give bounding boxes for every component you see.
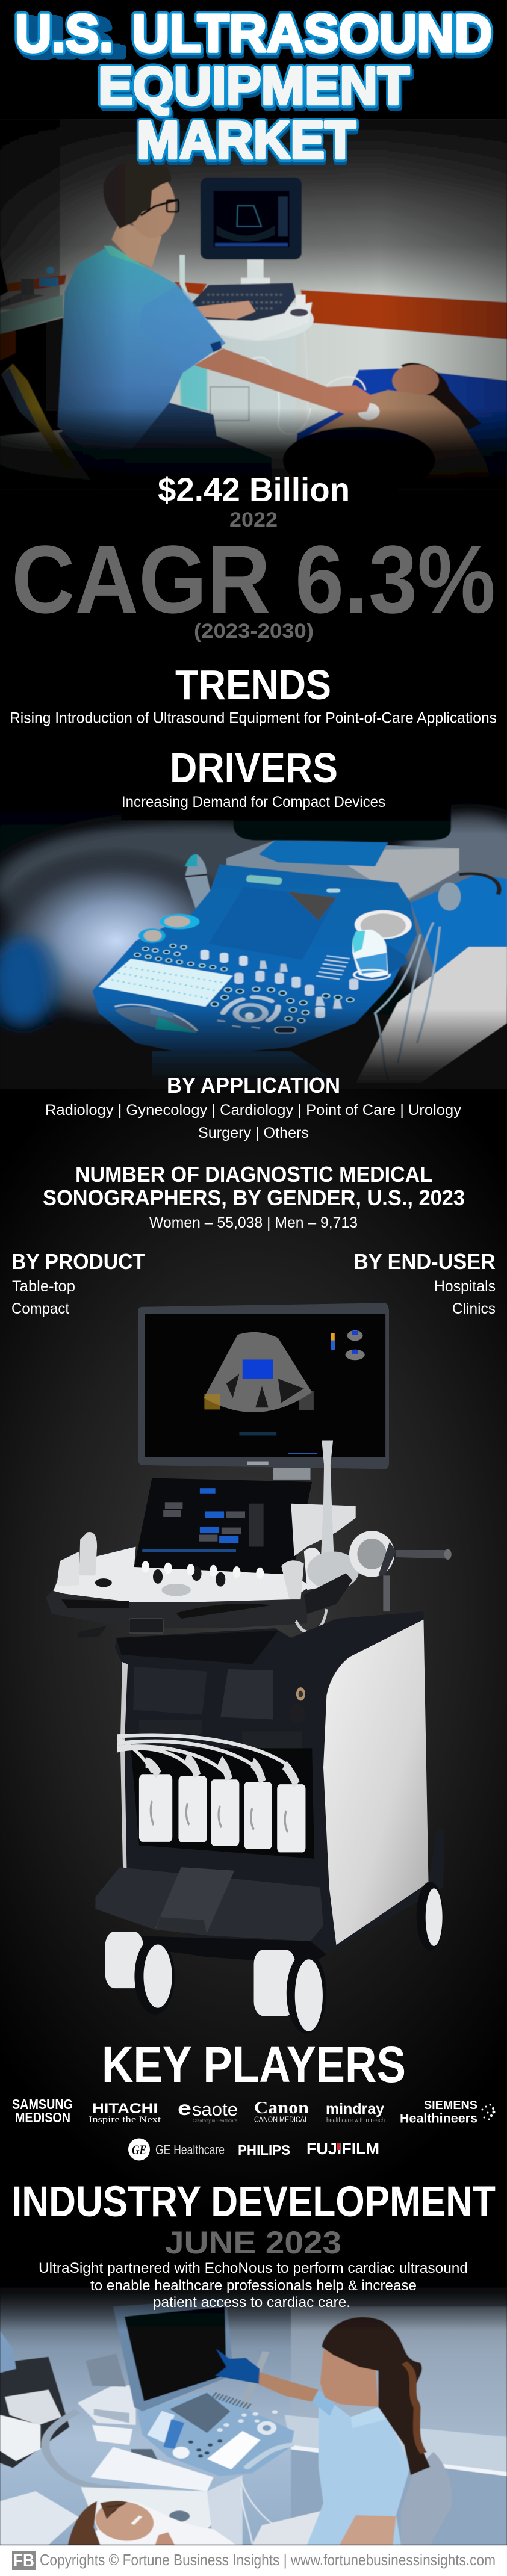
title: ULTRASOUND <box>132 4 492 63</box>
title: ULTRASOUND <box>133 7 492 67</box>
by end-user: BY END-USER <box>353 1249 496 1274</box>
by application: BY APPLICATION <box>167 1073 340 1098</box>
photo: sonographer examining patient <box>0 119 507 494</box>
monitor <box>233 803 452 841</box>
ultrasound machine illustration <box>46 1303 452 2034</box>
logo: Esaote: Creativity in Healthcare <box>193 2118 237 2124</box>
logo: Philips: PHILIPS <box>238 2142 290 2158</box>
probe bay with transducers <box>117 1735 314 1859</box>
logo: Esaote <box>178 2097 238 2124</box>
by application: Radiology | Gynecology | Cardiology | Point of Care | Urology <box>45 1102 462 1119</box>
right side probes and holder <box>281 1440 452 1633</box>
development description: patient access to cardiac care. <box>153 2294 350 2311</box>
deck <box>46 1532 359 1638</box>
photo: ultrasound console in blue <box>0 788 507 1089</box>
title: U.S. <box>15 4 113 63</box>
logo: Canon: CANON MEDICAL <box>254 2114 308 2124</box>
by end-user: Clinics <box>452 1300 496 1317</box>
logo: Siemens Healthineers <box>400 2099 495 2125</box>
touch panel <box>134 1478 312 1575</box>
by product: BY PRODUCT <box>11 1249 145 1274</box>
handle <box>115 1007 198 1033</box>
development description: to enable healthcare professionals help & increase <box>90 2278 417 2294</box>
main monitor <box>138 1303 389 1480</box>
logo: Esaote: e <box>178 2097 191 2119</box>
development description <box>39 2260 468 2311</box>
by end-user <box>353 1249 496 1317</box>
center background glow <box>0 1005 507 2220</box>
console <box>137 2391 294 2476</box>
wall rail <box>285 2415 507 2545</box>
logo: Siemens Healthineers: Healthineers <box>400 2112 477 2125</box>
logo: Hitachi: Inspire the Next <box>89 2115 161 2125</box>
console body <box>92 865 417 1056</box>
sliders <box>316 956 350 979</box>
title: U.S. <box>15 4 113 63</box>
development description: UltraSight partnered with EchoNous to perform cardiac ultrasound <box>39 2260 468 2276</box>
ultrasound monitor <box>201 178 302 285</box>
logo: GE Healthcare: GE Healthcare <box>155 2142 225 2157</box>
patient <box>281 363 507 494</box>
logo: GE Healthcare: GE <box>132 2142 146 2157</box>
logo: Hitachi <box>89 2101 161 2125</box>
sonographers statistic: Women – 55,038 | Men – 9,713 <box>149 1214 358 1231</box>
logo: GE Healthcare <box>128 2139 225 2160</box>
by application <box>45 1073 462 1141</box>
right probe <box>352 930 388 978</box>
logo: Fujifilm: FUJIFILM <box>306 2140 379 2158</box>
drivers heading: DRIVERS <box>170 744 338 791</box>
probe holder <box>184 853 211 909</box>
wheels <box>105 1882 444 2034</box>
logo: Mindray: healthcare within reach <box>326 2117 385 2124</box>
trends <box>10 661 497 727</box>
knobs <box>201 950 209 960</box>
title: MARKET <box>138 114 356 173</box>
by product: Compact <box>11 1300 69 1317</box>
title: U.S. <box>22 7 122 66</box>
title: EQUIPMENT <box>101 60 411 119</box>
cabinet <box>115 1611 444 1959</box>
footer <box>0 2545 507 2576</box>
logo: Samsung Medison: SAMSUNG <box>12 2096 73 2112</box>
logo: Samsung Medison <box>12 2096 73 2125</box>
sonographers statistic <box>43 1162 465 1231</box>
sonographer <box>215 2317 430 2545</box>
trackball <box>233 1003 269 1022</box>
logo: Canon: Canon <box>254 2098 309 2117</box>
trends: Rising Introduction of Ultrasound Equipment for Point-of-Care Applications <box>10 710 497 727</box>
shelf and boxes <box>0 2330 69 2468</box>
sonographers statistic: SONOGRAPHERS, BY GENDER, U.S., 2023 <box>43 1185 465 1210</box>
key players heading: KEY PLAYERS <box>102 2036 406 2093</box>
title: U.S. <box>17 8 118 67</box>
sonographers statistic: NUMBER OF DIAGNOSTIC MEDICAL <box>75 1162 432 1187</box>
cart back <box>226 841 507 1083</box>
by product: Table-top <box>12 1278 75 1295</box>
market size value: $2.42 Billion <box>158 471 350 508</box>
market size value <box>158 471 350 531</box>
logo: Samsung Medison: MEDISON <box>15 2110 70 2125</box>
development date: JUNE 2023 <box>165 2225 341 2261</box>
title: ULTRASOUND <box>132 4 492 63</box>
cup holders <box>160 914 199 929</box>
foot rest and pedal <box>95 1867 326 1964</box>
logo: Hitachi: HITACHI <box>92 2101 158 2117</box>
drivers text: Increasing Demand for Compact Devices <box>122 794 385 811</box>
monitor <box>113 2299 269 2411</box>
logo: Siemens Healthineers: SIEMENS <box>424 2099 477 2112</box>
ultrasound cart <box>179 326 311 460</box>
title: EQUIPMENT <box>98 56 409 116</box>
machine arm and base <box>0 2354 272 2545</box>
title: MARKET <box>137 110 356 170</box>
logo: Mindray: mindray <box>326 2101 384 2117</box>
by end-user: Hospitals <box>434 1278 496 1295</box>
title: MARKET <box>137 110 356 170</box>
logo: Esaote: saote <box>192 2099 238 2120</box>
by application: Surgery | Others <box>198 1125 309 1141</box>
logo: Canon <box>254 2098 309 2124</box>
button rows <box>134 944 353 1023</box>
by product <box>11 1249 145 1317</box>
touch screen <box>210 916 323 959</box>
console and keyboard <box>179 255 314 341</box>
icon: Fortune Business Insights logo: FB <box>13 2551 34 2571</box>
market size value: 2022 <box>229 508 278 531</box>
chair <box>401 2452 452 2545</box>
title: EQUIPMENT <box>98 56 409 116</box>
title <box>15 4 492 173</box>
trends: TRENDS <box>175 661 331 708</box>
CAGR figure: (2023-2030) <box>194 620 314 643</box>
title: U.S. <box>26 8 126 67</box>
keyboard <box>99 959 233 1007</box>
patient <box>67 2501 236 2545</box>
photo: sonographer with patient <box>0 2282 507 2547</box>
sonographer <box>58 160 372 489</box>
